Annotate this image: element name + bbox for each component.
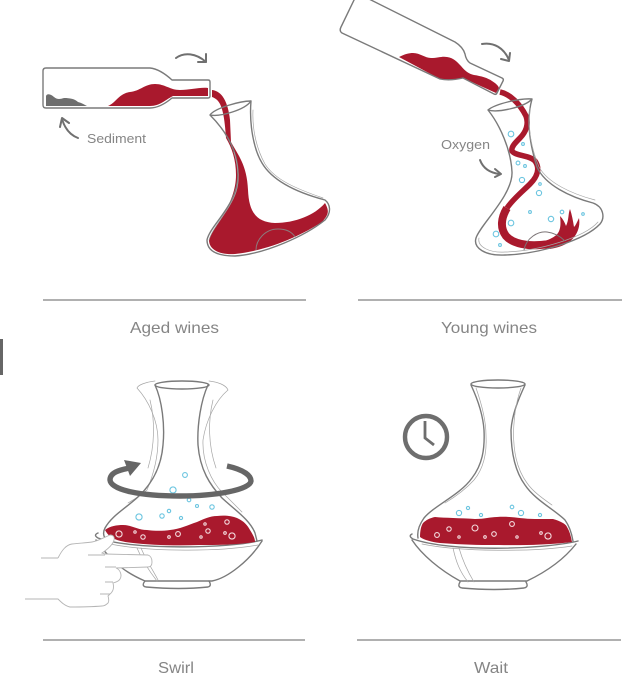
aged bottle [43, 68, 210, 108]
sediment arrow [60, 118, 78, 138]
wait label: Wait [474, 660, 509, 677]
young decanter [476, 99, 603, 255]
young bottle wine [399, 53, 499, 93]
oxygen label: Oxygen [441, 137, 490, 152]
panel: swirl [25, 381, 305, 677]
swirl label: Swirl [158, 660, 194, 677]
divider [43, 639, 305, 641]
young wines label: Young wines [441, 320, 537, 337]
sediment [46, 94, 87, 106]
wait decanter [418, 380, 573, 541]
divider [43, 299, 306, 301]
wait bubbles [456, 505, 542, 517]
edge marker [0, 339, 3, 375]
young pour arrow [482, 44, 510, 61]
icon: clock [405, 416, 447, 458]
wait bowl [410, 534, 578, 590]
aged decanter wine [209, 90, 328, 254]
swirl wine [105, 516, 255, 545]
ghost decanters [128, 381, 242, 512]
aged pour arrow [176, 54, 206, 62]
oxygen arrow [480, 160, 501, 177]
swirl wine bubbles [116, 520, 235, 539]
oxygen bubbles [493, 131, 584, 246]
panel: wait [357, 380, 621, 677]
wait wine [420, 517, 572, 545]
swirl arrow [110, 460, 251, 496]
young wine ribbon [500, 92, 579, 249]
swirl decanter [104, 381, 257, 541]
wait wine bubbles [435, 522, 551, 539]
aged wines label: Aged wines [130, 320, 219, 337]
swirl bubbles [136, 473, 214, 520]
aged decanter [207, 101, 330, 256]
panel: aged wines [43, 54, 330, 337]
hand [25, 535, 152, 607]
young bottle [340, 0, 503, 94]
divider [358, 299, 622, 301]
swirl bowl [96, 533, 262, 588]
panel: young wines [340, 0, 622, 337]
sediment label: Sediment [87, 131, 146, 146]
aged bottle wine [108, 84, 208, 106]
divider [357, 639, 621, 641]
